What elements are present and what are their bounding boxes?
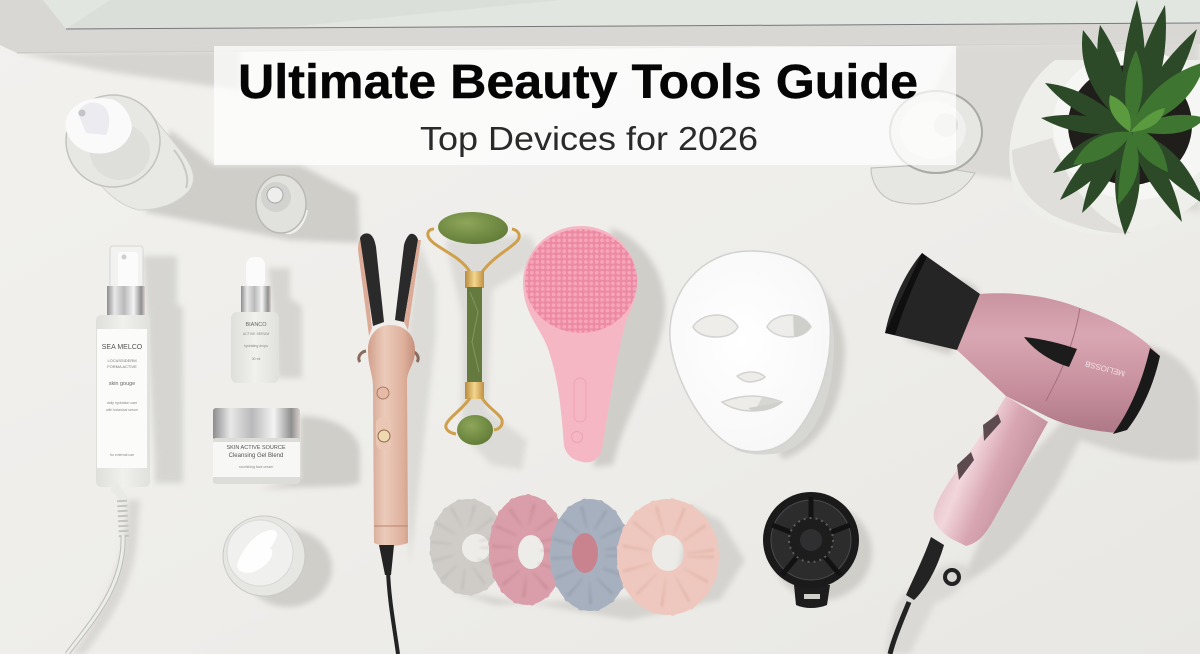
hair dryer: MELIOSSB (1084, 359, 1126, 378)
tall spray bottle: with botanical serum (106, 408, 138, 412)
scrunchies (430, 495, 719, 615)
small glass bottle (256, 175, 308, 234)
cream jar (213, 408, 300, 484)
title panel (214, 46, 956, 165)
serum dropper bottle: 30 ml (252, 357, 260, 361)
cream jar: SKIN ACTIVE SOURCE (226, 445, 286, 451)
open glass jar (223, 516, 305, 596)
serum dropper bottle: ACTIVE SERUM (243, 332, 269, 336)
cream jar: Cleansing Gel Blend (229, 453, 283, 459)
tall spray bottle: for external use (110, 453, 134, 457)
serum dropper bottle: hydrating drops (244, 344, 268, 348)
heading: Ultimate Beauty Tools Guide (238, 56, 918, 109)
tall spray bottle: daily hydration care (107, 401, 137, 405)
tall spray bottle: SEA MELCO (102, 344, 143, 351)
subheading: Top Devices for 2026 (420, 120, 758, 157)
facial cleansing brush (523, 226, 637, 462)
jade roller (428, 211, 519, 445)
hair dryer (885, 253, 1160, 654)
LED face mask (670, 251, 834, 455)
spray cord (67, 486, 126, 654)
curling iron (358, 233, 421, 654)
potted plant (1009, 0, 1200, 235)
mirror (0, 0, 1200, 53)
tall spray bottle: LOCASSIDERM (107, 358, 137, 363)
tall spray bottle (96, 246, 150, 487)
glass candle jar (871, 91, 982, 204)
cream jar: nourishing face cream (239, 465, 273, 469)
serum dropper bottle: BIANCO (245, 322, 267, 328)
serum dropper bottle (231, 257, 279, 383)
large glass bottle (66, 95, 194, 210)
diffuser attachment (763, 492, 859, 608)
tall spray bottle: FORMA ACTIVE (107, 364, 137, 369)
tall spray bottle: skin gouge (109, 381, 135, 387)
